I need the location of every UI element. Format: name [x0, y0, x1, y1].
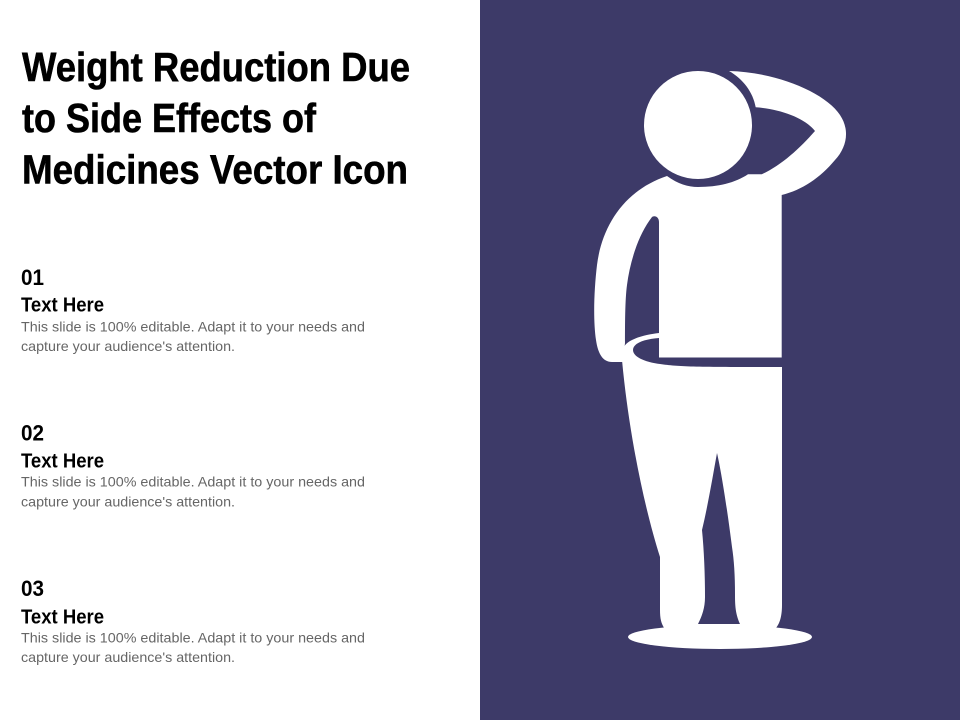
- text block 01: Text Here: [21, 294, 104, 316]
- title: Weight Reduction Due: [22, 44, 410, 90]
- panel: right background: [480, 0, 960, 720]
- text block 01: capture your audience's attention.: [21, 338, 235, 354]
- text block 03: capture your audience's attention.: [21, 649, 235, 665]
- icon: loose trousers: [622, 333, 782, 629]
- text block 03: Text Here: [21, 606, 104, 628]
- icon: ground ellipse: [628, 625, 812, 649]
- text block 02: This slide is 100% editable. Adapt it to your needs and: [21, 474, 365, 490]
- text block 02: capture your audience's attention.: [21, 494, 235, 510]
- text block 01: This slide is 100% editable. Adapt it to your needs and: [21, 318, 365, 334]
- text block 02: 02: [21, 420, 44, 446]
- text block 01: [21, 265, 365, 354]
- text block 03: This slide is 100% editable. Adapt it to your needs and: [21, 630, 365, 646]
- icon: upper body and arms: [594, 71, 846, 362]
- text block 02: [21, 420, 365, 510]
- icon: person with loose waistband: [594, 71, 846, 649]
- text block 01: 01: [21, 265, 44, 290]
- title: [22, 44, 410, 192]
- title: Medicines Vector Icon: [22, 146, 408, 192]
- text block 03: [21, 576, 365, 665]
- text block 03: 03: [21, 576, 44, 601]
- text block 02: Text Here: [21, 450, 104, 472]
- icon: head: [644, 71, 752, 179]
- title: to Side Effects of: [22, 95, 316, 141]
